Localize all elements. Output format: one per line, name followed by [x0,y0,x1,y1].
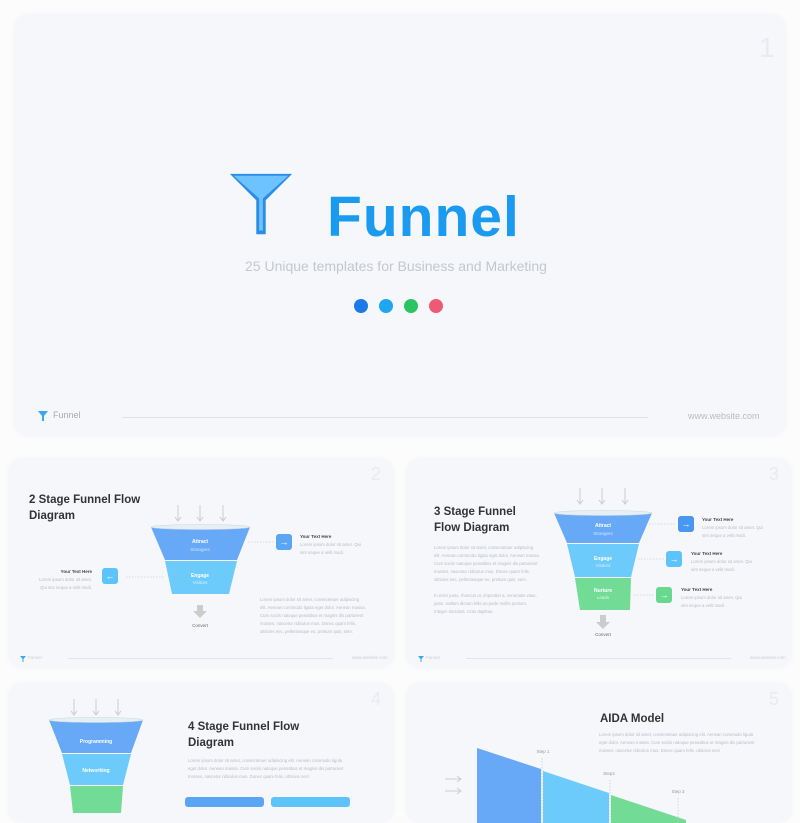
funnel chart: → [660,590,668,600]
callout right: sint neque a velit modi. [300,550,344,555]
callout right [300,534,361,555]
text block: Lorem ipsum dolor sit amet, consectetuer adipiscing [260,597,359,602]
funnel chart: Networking [82,768,110,774]
text block: montes, nascetur ridiculus mus. Donec quam felis, ultricies nec/ [188,774,309,779]
icon: funnel logo [230,174,292,234]
text block [599,732,754,753]
text block: elit. Aenean commodo ligula eget dolor. Aenean massa. [434,553,540,558]
funnel chart [49,699,143,813]
heading: Flow Diagram [434,522,509,534]
text block [434,545,540,614]
subtitle: 25 Unique templates for Business and Marketing [245,258,547,274]
heading [434,506,516,534]
funnel chart: ← [106,571,114,581]
callout left: Lorem ipsum dolor sit amet. [39,577,92,582]
callout right: Lorem ipsum dolor sit amet. Qui [300,542,361,547]
text block: In enim justo, rhoncus ut, imperdiet a, venenatis vitae, [434,593,537,598]
text block: justo. Nullam dictum felis eu pede mollis pretium. [434,601,527,606]
funnel chart: Attract [192,539,208,545]
heading [29,494,140,522]
heading: 3 Stage Funnel [434,506,516,518]
funnel chart: Attract [595,523,611,529]
color dots [354,299,443,313]
footer [20,655,388,662]
footer: Funnel [28,655,42,660]
callouts [702,517,763,538]
panel: slide 5: 5 [769,689,779,709]
text block: eget dolor. Aenean massa. Cum sociis natoque penatibus et magnis dis parturient [599,740,754,745]
text block: ultricies nec, pellentesque eu, pretium quis, sem. [260,629,353,634]
callouts: Your Text Here [702,517,733,522]
funnel chart: Engage [191,573,209,579]
callout left: Your Text Here [61,569,92,574]
panel: slide 3: sint neque a velit modi. [681,603,725,608]
AIDA chart: Step2 [603,771,615,776]
text block: eget dolor. Aenean massa. Cum sociis natoque penatibus et magnis dis parturient [188,766,344,771]
panel: slide 3: Lorem ipsum dolor sit amet. Qui [691,559,752,564]
panel: slide 4 [8,683,394,823]
text block: Cum sociis natoque penatibus et magnis dis parturient [434,561,537,566]
callout left: Qui sint neque a velit modi. [40,585,92,590]
heading [188,721,300,749]
text block: Lorem ipsum dolor sit amet, consectetuer adipiscing [434,545,533,550]
callouts: Lorem ipsum dolor sit amet. Qui [702,525,763,530]
text block [260,597,366,634]
footer: www.website.com [750,655,786,660]
footer: www.website.com [688,411,760,421]
text block: ultricies nec, pellentesque eu, pretium quis, sem. [434,577,527,582]
footer: Funnel [426,655,440,660]
text block: montes, nascetur ridiculus mus. Donec quam felis, [434,569,530,574]
heading: 2 Stage Funnel Flow [29,494,140,506]
panel: slide 4: 4 [371,689,381,709]
funnel chart [554,488,694,637]
text block: Cum sociis natoque penatibus et magnis dis parturient [260,613,363,618]
funnel chart: → [682,519,690,529]
panel: slide 3: Your Text Here [691,551,722,556]
title: Funnel [327,185,520,249]
text block: Lorem ipsum dolor sit amet, consectetuer adipiscing elit. Aenean commodo ligula [599,732,753,737]
buttons [185,797,264,807]
heading: Diagram [188,737,234,749]
heading: Diagram [29,510,75,522]
footer: www.website.com [352,655,388,660]
text block: montes, nascetur ridiculus mus. Donec quam felis, [260,621,356,626]
panel: slide 2 [8,458,394,668]
text block: Lorem ipsum dolor sit amet, consectetuer adipiscing elit. Aenean commodo ligula [188,758,342,763]
AIDA chart [445,748,686,823]
footer [418,655,786,662]
footer: Funnel [53,410,81,420]
funnel chart: Strangers [190,547,211,552]
funnel chart: Convert [192,623,209,628]
panel: cover slide [14,14,786,436]
text block: Integer tincidunt. Cras dapibus. [434,609,493,614]
funnel chart: Nurture [594,588,612,594]
funnel chart: Engage [594,556,612,562]
heading: 4 Stage Funnel Flow [188,721,299,733]
callout right: Your Text Here [300,534,331,539]
footer [38,410,760,421]
text block: elit. Aenean commodo ligula eget dolor. Aenean massa. [260,605,366,610]
callout left [39,569,92,590]
AIDA chart: Step 1 [536,749,550,754]
funnel chart [102,505,292,628]
panel: slide 3 [406,458,792,668]
panel: slide 3: sint neque a velit modi. [691,567,735,572]
text block [188,758,344,779]
heading: AIDA Model [600,713,664,725]
page number 1: 1 [759,32,775,63]
funnel chart: Programming [80,739,112,745]
funnel chart: → [670,554,678,564]
funnel chart: Convert [595,632,612,637]
text block: montes, nascetur ridiculus mus. Donec quam felis, ultricies nec/ [599,748,720,753]
funnel chart: Visitors [193,580,208,585]
funnel chart: → [280,537,288,547]
panel: slide 3: 3 [769,464,779,484]
AIDA chart: Step 3 [671,789,685,794]
callouts: sint neque a velit modi. [702,533,746,538]
panel: slide 2: 2 [371,464,381,484]
funnel chart: Visitors [596,563,611,568]
funnel chart: Leads [597,595,610,600]
panel: slide 3: Your Text Here [681,587,712,592]
panel: slide 3: Lorem ipsum dolor sit amet. Qui [681,595,742,600]
panel: slide 5 [406,683,792,823]
funnel chart: Strangers [593,531,614,536]
